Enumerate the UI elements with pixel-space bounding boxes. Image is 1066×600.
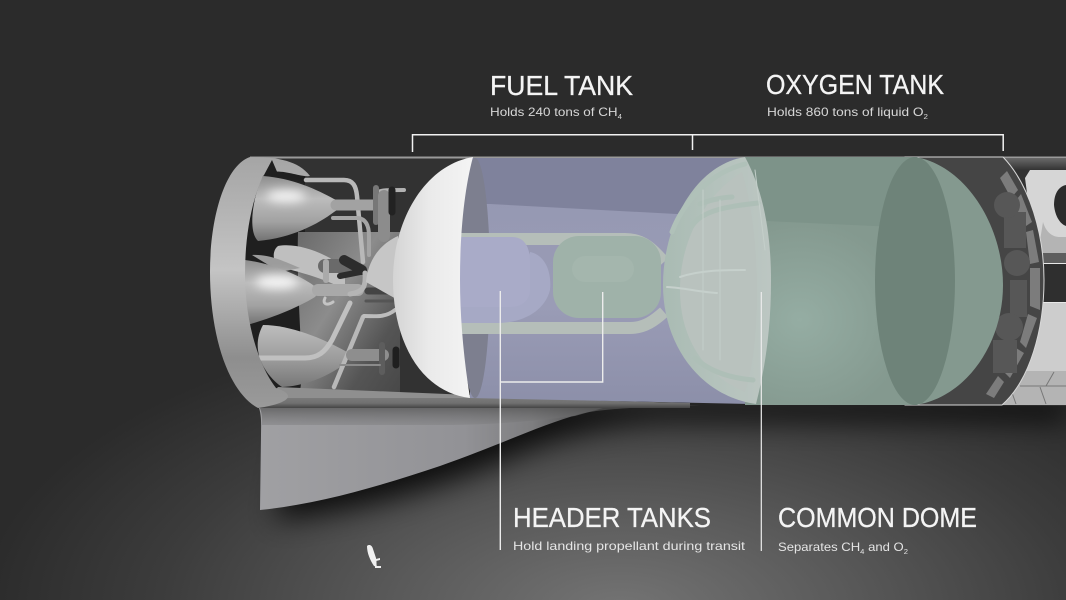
engine bay wall — [268, 232, 470, 398]
middle engine bell — [243, 260, 320, 325]
label: common dome — [778, 502, 977, 556]
label: common dome: 4 — [860, 549, 865, 556]
label: fuel tank: Holds 240 tons of CH — [490, 105, 604, 119]
common dome leader line — [760, 292, 762, 551]
engine bay shadow — [245, 172, 305, 388]
cast shadow — [275, 400, 1066, 520]
engine details — [257, 260, 400, 387]
label: fuel tank: FUEL TANK — [490, 70, 633, 101]
label: oxygen tank — [766, 69, 944, 121]
forward brick section — [1000, 371, 1066, 405]
oxygen header tank — [553, 236, 661, 318]
dome struts — [667, 164, 765, 380]
common dome — [663, 157, 771, 404]
aft ring — [210, 157, 310, 408]
rear engine bell — [274, 245, 345, 290]
oxygen tank walls — [745, 157, 917, 405]
bulkhead cells — [986, 171, 1040, 398]
forward dark bay — [1040, 253, 1066, 302]
label: oxygen tank: Holds 860 tons of liquid O — [767, 105, 904, 119]
header tanks leader lines — [500, 291, 603, 550]
label: oxygen tank: 2 — [924, 114, 928, 121]
label: oxygen tank: OXYGEN TANK — [766, 69, 944, 100]
label: header tanks: Hold landing propellant during transit — [513, 539, 746, 553]
label: fuel tank — [490, 70, 633, 121]
fin — [258, 405, 700, 510]
thrust dome — [366, 236, 398, 300]
label: common dome: 2 — [904, 549, 908, 556]
oxygen tank — [745, 157, 1044, 405]
oxygen tank dome — [915, 157, 1003, 405]
bottom engine bell — [258, 325, 347, 387]
fuel header tank — [460, 237, 550, 323]
fuel and oxygen bracket — [412, 135, 1003, 152]
tube interior — [250, 157, 1066, 406]
oxygen tank end — [875, 157, 955, 405]
label: common dome: COMMON DOME — [778, 502, 977, 533]
icon: human scale figure — [367, 545, 381, 568]
bulkhead machinery — [905, 157, 1044, 405]
bulkhead equipment — [993, 192, 1030, 373]
label: header tanks — [513, 502, 746, 553]
label: fuel tank: 4 — [618, 114, 622, 121]
forward lower panel — [1020, 303, 1066, 371]
hull strip — [258, 396, 690, 408]
fuel tank inner end — [460, 158, 490, 398]
top engine plumbing — [306, 180, 404, 262]
rocket cutaway — [210, 69, 1066, 568]
aft dome — [393, 157, 473, 398]
label: common dome: and O — [864, 540, 904, 554]
forward section — [1000, 158, 1066, 405]
dome inner frame — [680, 172, 757, 392]
fuel tank walls — [470, 158, 750, 404]
label: header tanks: HEADER TANKS — [513, 502, 711, 533]
fuel tank — [460, 158, 750, 404]
forward upper panel — [1025, 170, 1066, 253]
label: common dome: Separates CH — [778, 540, 853, 554]
fuel tank upper band — [470, 158, 750, 218]
header pipe loop — [460, 239, 664, 328]
engines — [243, 176, 404, 387]
top engine bell — [252, 176, 346, 241]
